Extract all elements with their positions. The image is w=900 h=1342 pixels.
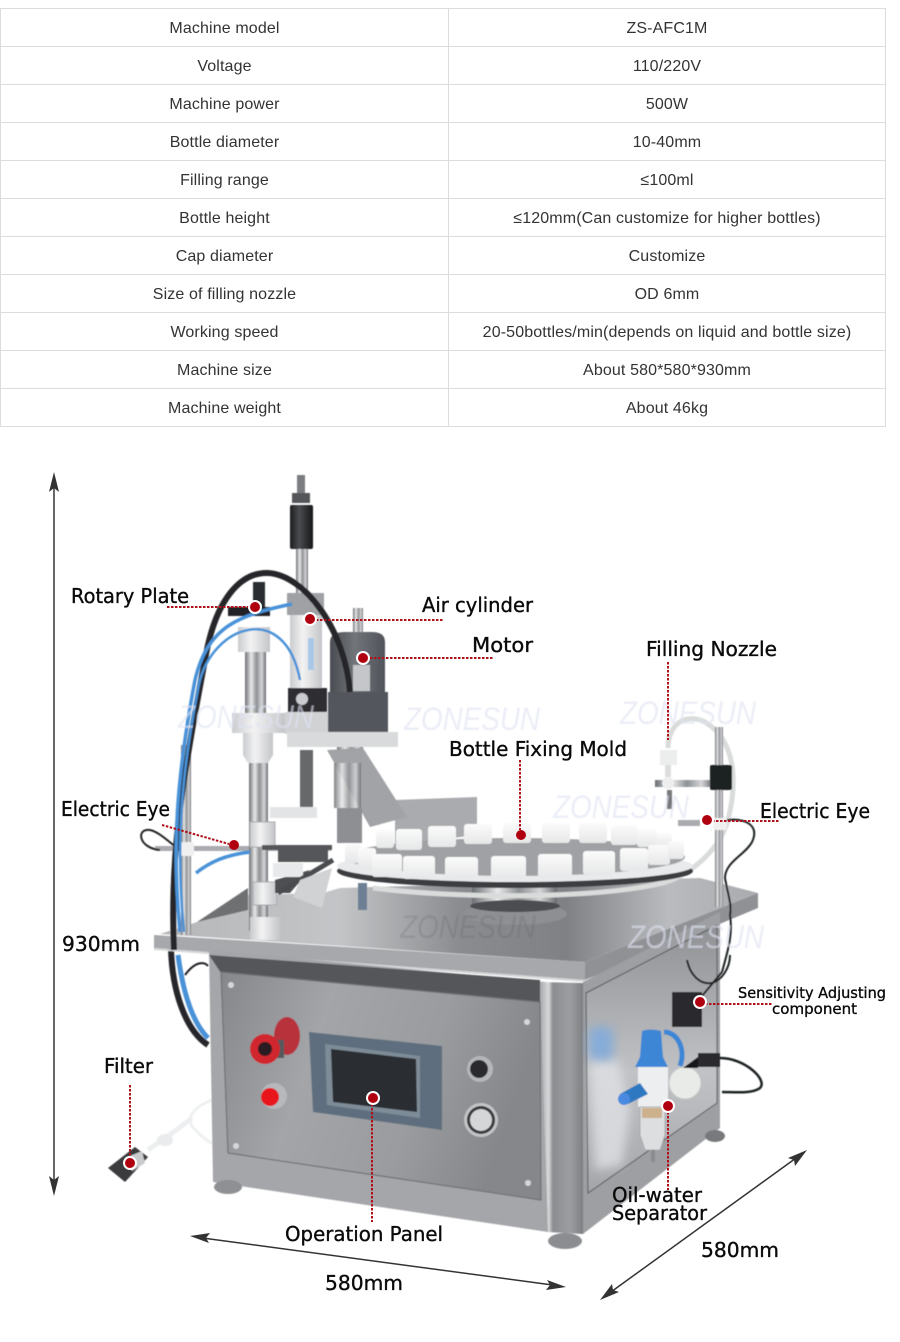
front door panel (221, 972, 541, 1200)
side door panel (586, 925, 717, 1193)
arrow: front width dimension (190, 1233, 566, 1290)
watermarks: ZONESUN (619, 695, 757, 731)
labels: Rotary Plate (71, 584, 189, 608)
specification table: ZS-AFC1M (626, 20, 708, 36)
labels (61, 584, 886, 1295)
left column (253, 582, 265, 610)
labels: 930mm (62, 932, 140, 956)
specification table: Bottle height (179, 210, 270, 226)
specification table: ≤100ml (640, 172, 694, 188)
back row molds (376, 823, 672, 850)
knobs (464, 1056, 498, 1137)
sensitivity adjusting component and power cable (672, 955, 762, 1092)
red push button (261, 1083, 287, 1109)
back hopper box (395, 797, 477, 845)
specification table: About 580*580*930mm (583, 362, 751, 378)
labels: Electric Eye (61, 797, 170, 821)
lower conduit and wires beside cabinet (171, 948, 208, 1045)
watermarks: ZONESUN (403, 701, 541, 737)
filling tube (373, 719, 733, 896)
bearing hub (358, 883, 567, 925)
labels: Separator (612, 1201, 708, 1225)
specification table (0, 8, 886, 427)
blue air tubes (176, 604, 300, 932)
labels: Oil-water (612, 1183, 703, 1207)
labels: Electric Eye (760, 799, 870, 823)
labels: Motor (472, 633, 534, 657)
specification table: Customize (629, 248, 705, 264)
rotary disc with bottle molds (337, 823, 693, 888)
labels: Operation Panel (285, 1222, 443, 1246)
labels: 580mm (701, 1238, 779, 1262)
specification table: 10-40mm (633, 134, 701, 150)
reflection on side door (590, 1060, 630, 1170)
labels: Air cylinder (422, 593, 534, 617)
specification table: Machine size (177, 362, 272, 378)
specification table: ≤120mm(Can customize for higher bottles) (513, 210, 821, 226)
watermarks (177, 695, 765, 955)
air cylinder (290, 593, 322, 693)
watermarks: ZONESUN (399, 909, 537, 945)
specification table: Filling range (180, 172, 269, 188)
left support frame and air cylinder (141, 475, 335, 940)
filling nozzle stand (655, 727, 754, 972)
specification table: 20-50bottles/min(depends on liquid and bottle size) (483, 324, 851, 340)
specification table: Working speed (170, 324, 279, 340)
specification table: Cap diameter (176, 248, 273, 264)
specification table: 500W (646, 96, 688, 112)
motor and gearbox (287, 608, 398, 765)
machine illustration (108, 475, 765, 1249)
watermarks: ZONESUN (177, 699, 315, 735)
watermarks: ZONESUN (552, 789, 690, 825)
specification table: Machine model (169, 20, 280, 36)
specification table: Bottle diameter (170, 134, 279, 150)
specification table: Size of filling nozzle (153, 286, 296, 302)
front row molds (345, 841, 684, 879)
labels: Filter (104, 1054, 154, 1078)
labels: Filling Nozzle (646, 637, 777, 661)
emergency stop button (250, 1017, 300, 1064)
top screw rod (297, 475, 305, 493)
door screws (228, 982, 531, 1186)
specification table: Machine weight (168, 400, 281, 416)
feet (214, 1180, 242, 1194)
arrow: height dimension (49, 472, 59, 1196)
touch screen panel (309, 1032, 442, 1130)
specification table: Voltage (197, 58, 252, 74)
labels: Bottle Fixing Mold (449, 737, 627, 761)
cabinet body (209, 912, 725, 1249)
filter and inlet tube (108, 1100, 213, 1182)
labels: 580mm (325, 1271, 403, 1295)
black conduit (173, 573, 350, 950)
oil-water separator (618, 1030, 701, 1162)
sensor rod (181, 745, 191, 935)
table top plate (154, 878, 758, 982)
labels: Sensitivity Adjusting (738, 984, 886, 1002)
specification table: About 46kg (626, 400, 708, 416)
specification table: 110/220V (633, 58, 701, 74)
watermarks: ZONESUN (627, 919, 765, 955)
labels: component (772, 1000, 857, 1018)
specification table: Machine power (169, 96, 280, 112)
arrow: side depth dimension (600, 1150, 807, 1300)
chute and lower cylinder (327, 748, 407, 843)
specification table: OD 6mm (635, 286, 699, 302)
leader lines and dots (123, 600, 780, 1222)
screw and bracket (300, 750, 313, 808)
